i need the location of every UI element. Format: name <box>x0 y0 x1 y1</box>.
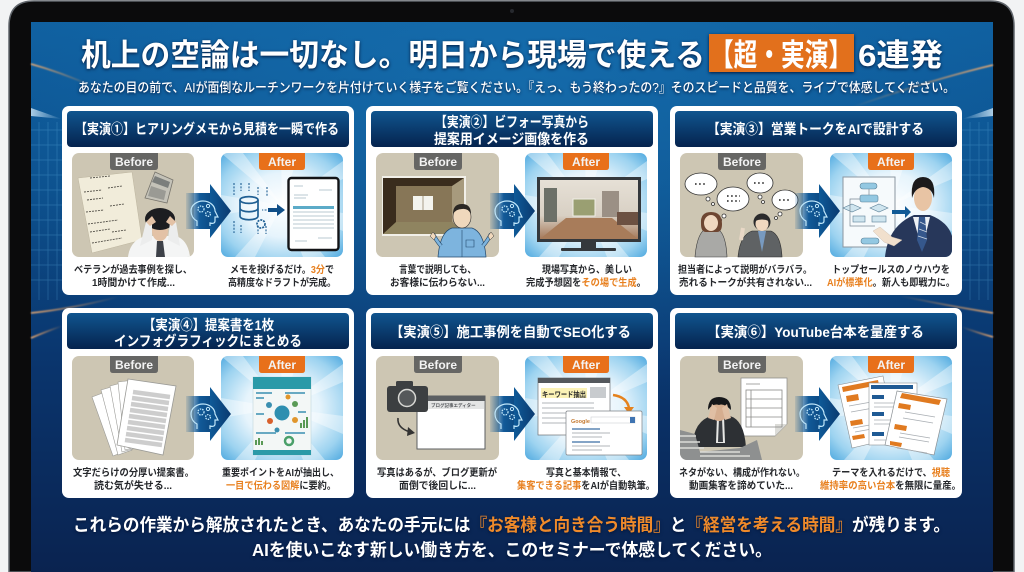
heading: demo 5 <box>371 313 653 349</box>
caption: before 2: 言葉で説明しても、 <box>399 263 476 276</box>
caption: after 5 line 2: 集客できる記事をAIが自動執筆。 <box>517 479 655 492</box>
after: demo 3 <box>830 153 952 257</box>
before: demo 1 <box>72 153 194 257</box>
caption: before 5 line 2: 面倒で後回しに... <box>399 479 476 492</box>
badge: Before: Before <box>723 358 761 372</box>
after: demo 1 <box>221 153 343 257</box>
caption: after 5: 写真と基本情報で、 <box>546 466 626 479</box>
arrow: demo 4 <box>186 387 231 441</box>
caption: before 3: 担当者によって説明がバラバラ。 <box>678 263 812 276</box>
panel: demo 6 <box>670 308 962 498</box>
subtitle: あなたの目の前で、AIが面倒なルーチンワークを片付けていく様子をご覧ください。『えっ、もう終わったの?』そのスピードと品質を、ライブで体感してください。 <box>78 80 955 95</box>
badge: Before: Before <box>419 155 457 169</box>
heading: demo 6: 【実演⑥】YouTube台本を量産する <box>707 324 924 340</box>
caption: after 2: 現場写真から、美しい <box>542 263 632 276</box>
caption: after 1 line 2: 高精度なドラフトが完成。 <box>228 276 336 289</box>
after: demo 5 <box>525 356 647 460</box>
caption: before 1: ベテランが過去事例を探し、 <box>74 263 192 276</box>
title: 机上の空論は一切なし。明日から現場で使える <box>81 38 705 73</box>
title <box>81 34 943 73</box>
caption: before 6 line 2: 動画集客を諦めていた... <box>689 479 793 492</box>
caption: after 4: 重要ポイントをAIが抽出し、 <box>222 466 339 479</box>
title highlight box <box>709 34 854 72</box>
heading: demo 4: インフォグラフィックにまとめる <box>114 333 302 349</box>
caption: before 5: 写真はあるが、ブログ更新が <box>377 466 497 479</box>
arrow: demo 5 <box>490 387 535 441</box>
after: demo 5: Google <box>571 419 590 425</box>
caption: before 6: ネタがない、構成が作れない。 <box>679 466 805 479</box>
after: demo 5: キーワード抽出 <box>542 389 586 399</box>
closing message: これらの作業から解放されたとき、あなたの手元には『お客様と向き合う時間』と『経営を考える時間』が残ります。 <box>73 515 950 535</box>
badge: After: After <box>268 358 296 372</box>
heading: demo 5: 【実演⑤】施工事例を自動でSEO化する <box>390 324 631 340</box>
panel: demo 2 <box>366 106 658 295</box>
caption: after 6: テーマを入れるだけで、視聴 <box>832 466 950 479</box>
badge: Before: Before <box>115 358 153 372</box>
heading: demo 4: 【実演④】提案書を1枚 <box>143 317 274 333</box>
closing message <box>73 515 950 560</box>
caption: after 4 line 2: 一目で伝わる図解に要約。 <box>226 479 336 492</box>
arrow: demo 3 <box>795 184 840 238</box>
heading: demo 3 <box>675 111 957 147</box>
before: demo 5 <box>376 356 499 460</box>
after: demo 2 <box>525 153 647 257</box>
heading: demo 2 <box>371 111 653 147</box>
closing message: AIを使いこなす新しい働き方を、このセミナーで体感してください。 <box>252 540 772 560</box>
caption: after 6 line 2: 維持率の高い台本を無限に量産。 <box>820 479 961 492</box>
arrow: demo 1 <box>186 184 231 238</box>
badge: After: After <box>877 358 905 372</box>
panel: demo 5 <box>366 308 658 498</box>
badge: After: After <box>268 155 296 169</box>
panel: demo 3 <box>670 106 962 295</box>
before: demo 6 <box>680 356 803 460</box>
heading: demo 4 <box>67 313 349 349</box>
caption: after 2 line 2: 完成予想図をその場で生成。 <box>526 276 646 289</box>
before: demo 4 <box>72 356 194 460</box>
caption: before 2 line 2: お客様に伝わらない... <box>390 276 485 289</box>
panel: demo 4 <box>62 308 354 498</box>
heading: demo 6 <box>675 313 957 349</box>
before: demo 2 <box>376 153 499 257</box>
caption: before 1 line 2: 1時間かけて作成... <box>92 276 175 289</box>
after: demo 4 <box>221 356 343 460</box>
caption: before 3 line 2: 売れるトークが共有されない... <box>679 276 812 289</box>
after: demo 6 <box>830 356 952 460</box>
arrow: demo 6 <box>795 387 840 441</box>
caption: after 3: トップセールスのノウハウを <box>832 264 950 276</box>
panel: demo 1 <box>62 106 354 295</box>
before: demo 5: ブログ記事エディター <box>431 402 476 409</box>
heading: demo 2: 【実演②】ビフォー写真から <box>435 114 589 130</box>
caption: after 1: メモを投げるだけ。3分で <box>230 263 334 276</box>
caption: after 3 line 2: AIが標準化。新人も即戦力に。 <box>827 276 955 289</box>
badge: After: After <box>572 358 600 372</box>
arrow: demo 2 <box>490 184 535 238</box>
caption: before 4 line 2: 読む気が失せる... <box>94 479 172 492</box>
badge: Before: Before <box>723 155 761 169</box>
heading: demo 3: 【実演③】営業トークをAIで設計する <box>707 121 924 137</box>
badge: Before: Before <box>419 358 457 372</box>
badge: After: After <box>877 155 905 169</box>
caption: before 4: 文字だらけの分厚い提案書。 <box>73 466 194 479</box>
heading: demo 1: 【実演①】ヒアリングメモから見積を一瞬で作る <box>75 121 339 137</box>
heading: demo 2: 提案用イメージ画像を作る <box>434 131 589 147</box>
badge: After: After <box>572 155 600 169</box>
title: 【超・実演】 <box>710 38 852 73</box>
title: 6連発 <box>858 38 943 73</box>
badge: Before: Before <box>115 155 153 169</box>
before: demo 3 <box>680 153 803 257</box>
heading: demo 1 <box>67 111 349 147</box>
